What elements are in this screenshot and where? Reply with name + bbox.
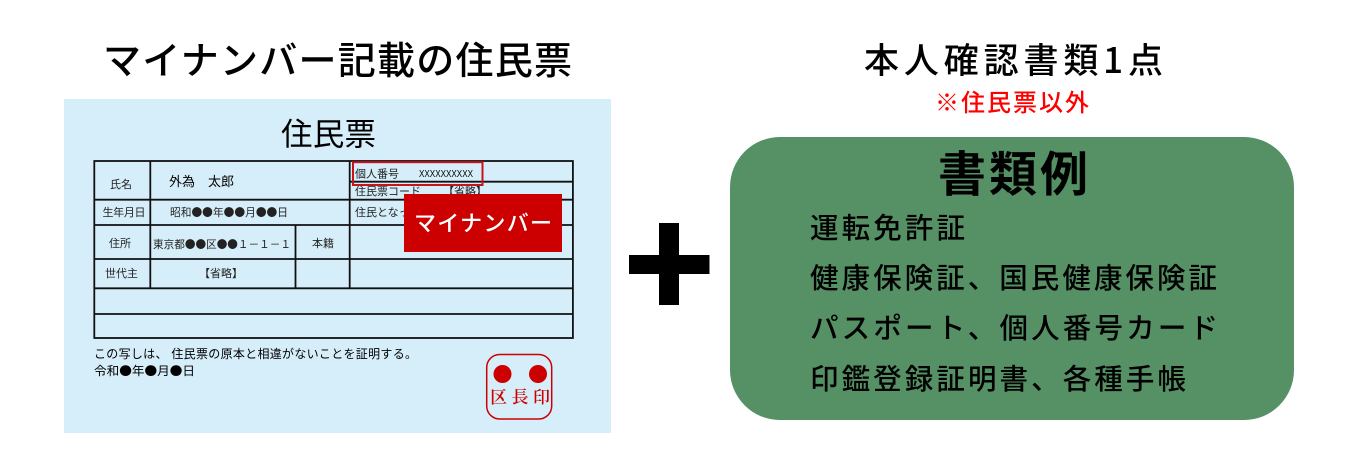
table labels: 【省略】 [199, 266, 243, 280]
certification text: この写しは、 住民票の原本と相違がないことを証明する。 [94, 346, 417, 361]
card title: 住民票 [281, 116, 376, 152]
document list: 運転免許証 [810, 213, 965, 245]
table labels: 【省略】 [443, 184, 487, 198]
callout: my number [404, 194, 562, 252]
panel: document examples [730, 137, 1294, 420]
panel: resident card [64, 99, 611, 433]
left heading: マイナンバー記載の住民票 [103, 41, 572, 83]
table labels: 住民となった年月日 [355, 205, 454, 219]
table labels: 本籍 [312, 236, 334, 250]
red highlight around individual number [353, 162, 482, 185]
certification text [94, 346, 417, 379]
right sub-note: ※住民票以外 [935, 90, 1089, 117]
table labels [102, 168, 487, 280]
table labels: 生年月日 [102, 205, 146, 219]
document list: パスポート、個人番号カード [810, 313, 1218, 345]
table labels: 氏名 [110, 177, 132, 191]
panel heading: 書類例 [938, 149, 1088, 202]
table labels: 世代主 [105, 267, 138, 280]
table labels: XXXXXXXXXX [419, 169, 473, 180]
certification text: 令和●年●月●日 [94, 362, 195, 379]
icon: seal stamp: 区長印 [490, 383, 550, 408]
table labels: 住所 [109, 236, 131, 250]
right heading: 本人確認書類1点 [864, 33, 1163, 84]
table labels: 昭和●●年●●月●●日 [170, 204, 288, 220]
document list [810, 213, 1218, 396]
table labels: 個人番号 [355, 168, 399, 180]
document list: 健康保険証、国民健康保険証 [810, 263, 1217, 295]
callout: my number: マイナンバー [414, 211, 552, 236]
table labels: 外為 太郎 [169, 174, 234, 189]
document list: 印鑑登録証明書、各種手帳 [810, 364, 1186, 396]
table labels: 住民票コード [355, 184, 421, 198]
table labels: 東京都●●区●●１－１－１ [153, 236, 291, 252]
icon: plus sign [629, 223, 710, 305]
icon: seal stamp [487, 354, 552, 419]
form table [94, 161, 573, 338]
